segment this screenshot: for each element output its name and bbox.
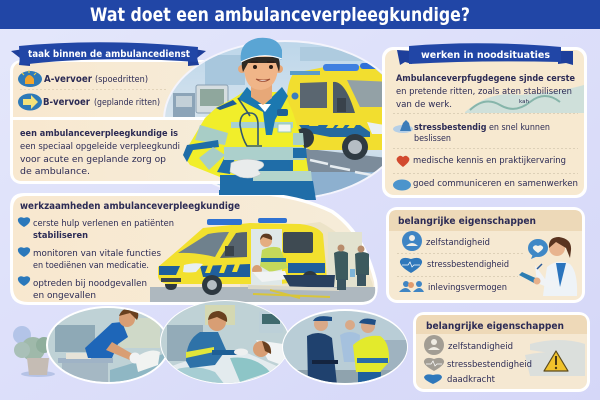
decorative plant — [13, 326, 55, 377]
bystanders — [334, 244, 369, 290]
icon: alarm bell — [393, 120, 413, 133]
bullet 1 — [33, 219, 174, 241]
label zelfstandigheid: zelfstandigheid — [448, 342, 513, 352]
intro text: van de werk. — [396, 100, 452, 110]
label stressbestendigheid: stressbestendigheid — [447, 360, 532, 370]
paramedic — [260, 234, 288, 272]
heading: belangrijke eigenschappen — [398, 216, 536, 227]
icon: siren — [18, 70, 42, 87]
oval: nurse with patient in bed — [160, 300, 290, 390]
hero oval: nurse and ambulance — [13, 38, 407, 200]
banner — [397, 43, 573, 65]
intro text — [396, 74, 575, 110]
title bar — [0, 0, 600, 29]
panel: belangrijke eigenschappen 1 — [386, 207, 585, 303]
text block: definitie: een speciaal opgeleide verpleegkundi — [20, 142, 180, 152]
bullet 1: stabiliseren — [33, 231, 88, 241]
list row 1: beslissen — [414, 134, 451, 144]
glove — [230, 159, 264, 178]
neck and head — [251, 84, 272, 105]
icon: people — [399, 281, 424, 292]
bullet 2: en toediënen van medicatie. — [33, 261, 149, 271]
bullet 3 — [33, 279, 147, 301]
label daadkracht: daadkracht — [447, 375, 496, 385]
text block: definitie — [20, 129, 180, 177]
text block: definitie: een ambulanceverpleegkundige is — [20, 129, 178, 139]
banner — [11, 42, 206, 66]
intro text: en pretende ritten, zoals aten stabiliseren — [396, 87, 572, 97]
icon: person grey — [424, 335, 444, 355]
nurse jacket hem — [219, 190, 310, 195]
icon: blue heart — [424, 374, 442, 384]
panel: belangrijke eigenschappen 2 — [413, 312, 590, 392]
cap — [241, 38, 282, 62]
patient and stretcher — [248, 265, 339, 298]
background scene — [240, 222, 374, 290]
ambulance with stretcher — [158, 218, 369, 298]
vervoer rows: (spoedritten) — [95, 75, 148, 85]
label inlevingsvermogen: inlevingsvermogen — [428, 283, 507, 293]
intro text: kah — [519, 99, 529, 105]
panel: werkzaamheden ambulanceverpleegkundige — [10, 190, 378, 305]
bullet 1: cerste hulp verlenen en patiënten — [33, 219, 174, 229]
doctor illustration — [519, 237, 577, 296]
list row 2: medische kennis en praktijkervaring — [413, 156, 566, 166]
heading: belangrijke eigenschappen — [426, 321, 564, 332]
nurse — [183, 38, 316, 200]
vervoer rows: A-vervoer — [44, 74, 92, 85]
ambulance body — [286, 63, 382, 160]
banner: taak binnen de ambulancedienst — [28, 49, 190, 60]
text block: definitie: de ambulance. — [20, 167, 90, 177]
heading: werkzaamheden ambulanceverpleegkundige — [20, 201, 240, 212]
list row 1 — [414, 123, 550, 144]
icon: medical heart — [397, 156, 409, 167]
list row 1: stressbestendig en snel kunnen — [414, 123, 550, 133]
list row 3: goed communiceren en samenwerken — [413, 179, 578, 189]
vervoer rows: (geplande ritten) — [94, 98, 160, 108]
oval: nurse treating patient — [46, 306, 166, 384]
lower text panel backing — [13, 117, 222, 184]
icon: cloud communication — [393, 180, 411, 190]
icon: heartbeat — [400, 258, 422, 273]
panel: taak binnen de ambulancedienst — [10, 38, 407, 200]
vervoer rows: B-vervoer — [43, 97, 90, 108]
icon: arrow — [18, 94, 42, 110]
stethoscope — [238, 98, 262, 146]
bullet 2: monitoren van vitale functies — [33, 249, 161, 259]
icon: person — [402, 231, 422, 251]
road — [306, 148, 382, 172]
icon: speech bubble with heart — [528, 239, 548, 259]
icon: heart bullet 3 — [18, 276, 30, 286]
panel: werken in noodsituaties — [382, 43, 587, 198]
banner: werken in noodsituaties — [421, 50, 550, 61]
icon: heartbeat grey — [424, 358, 444, 371]
text block: definitie: voor acute en geplande zorg op — [20, 155, 166, 165]
bullet 2 — [33, 249, 161, 271]
intro text: Ambulanceverpfugdegene sjnde cerste — [396, 74, 575, 84]
vervoer rows — [43, 74, 160, 108]
monitors — [196, 85, 228, 113]
bullet 3: optreden bij noodgevallen — [33, 279, 147, 289]
icon: heart bullet 2 — [18, 247, 30, 257]
title bar: Wat doet een ambulanceverpleegkundige? — [90, 4, 470, 26]
icon: heart bullet 1 — [18, 217, 30, 227]
label zelfstandigheid: zelfstandigheid — [426, 238, 490, 248]
bullet 3: en ongevallen — [33, 291, 96, 301]
icon: warning triangle — [544, 351, 568, 371]
label stressbestendigheid: stressbestendigheid — [427, 260, 509, 270]
oval: police and paramedic — [280, 309, 410, 390]
